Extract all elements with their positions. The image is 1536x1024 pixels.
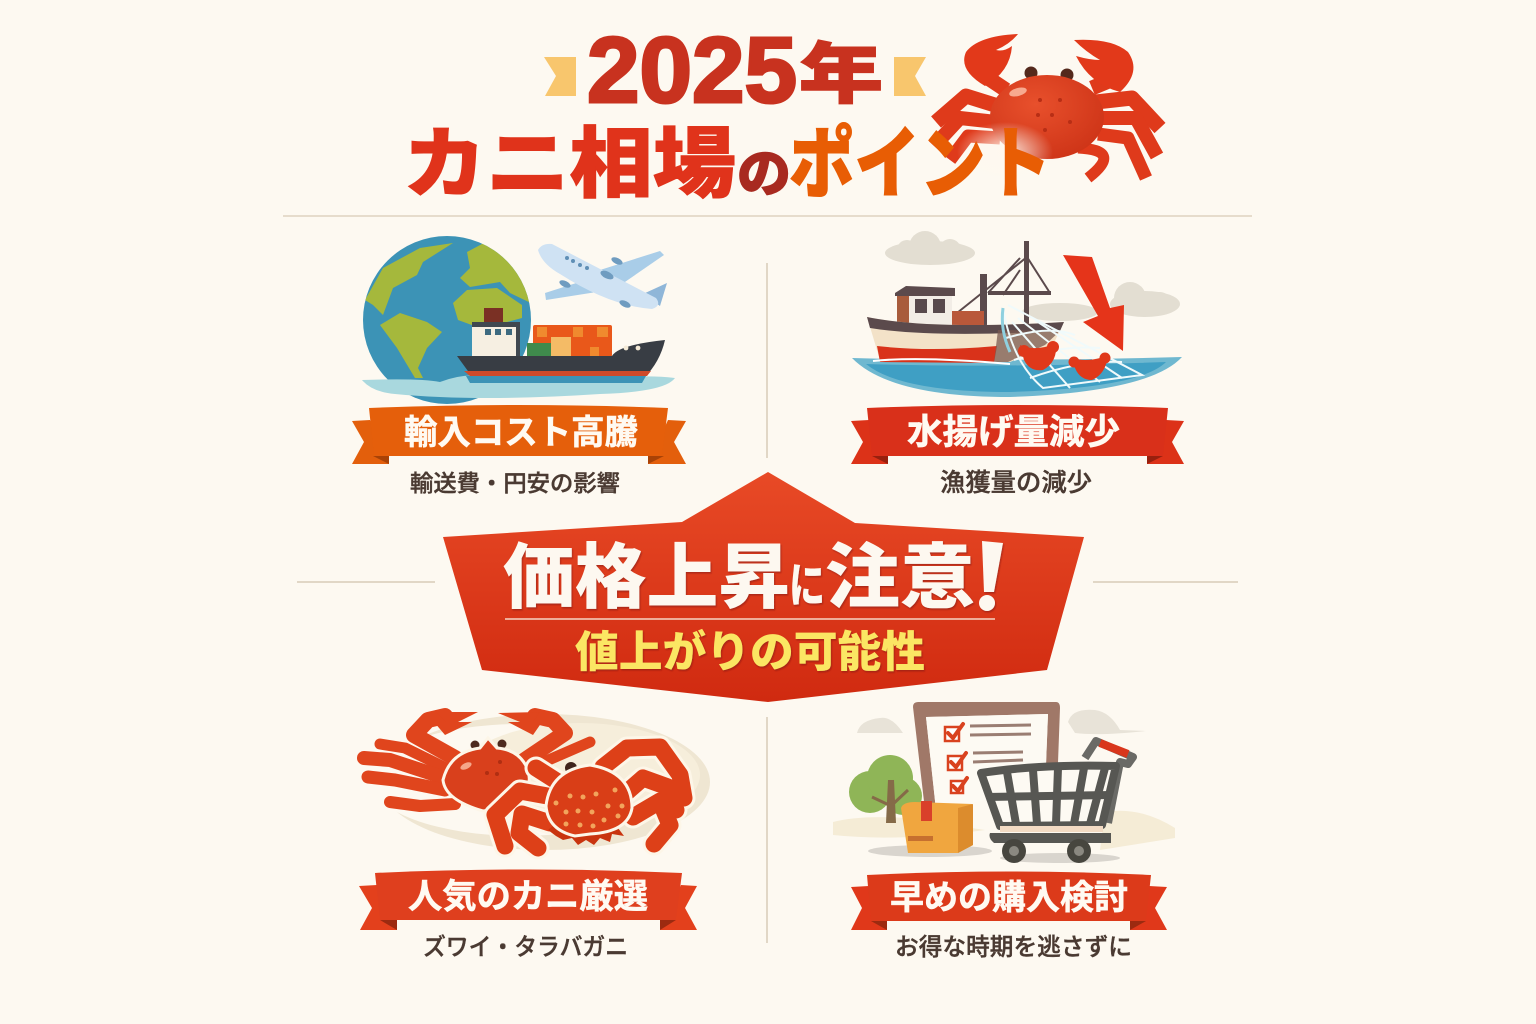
icon: airplane: [538, 244, 667, 309]
icon: tree: [849, 755, 922, 823]
ribbon: buy early: 早めの購入検討: [890, 879, 1128, 917]
title ribbon accent left: [544, 57, 576, 96]
divider rule: [505, 618, 995, 620]
icon: globe: [363, 236, 535, 404]
title: カニ相場のポイント: カニ相場: [403, 122, 736, 208]
caption: import cost: 輸送費・円安の影響: [410, 470, 620, 496]
ribbon: popular crabs: [359, 870, 697, 930]
heading: price warning: [503, 539, 1003, 618]
ribbon: popular crabs: 人気のカニ厳選: [408, 878, 648, 916]
icon: parcel: [868, 801, 992, 857]
heading: price warning: に: [789, 560, 825, 613]
icon: king crab: [495, 747, 684, 848]
icon: snow crab: [364, 712, 590, 811]
title: 2025年: [587, 18, 883, 122]
icon: water: [362, 375, 675, 398]
panel: buy early: [833, 702, 1175, 961]
icon: clouds: [885, 231, 1180, 321]
callout: price warning badge: [443, 472, 1084, 702]
subheading: possible increase: 値上がりの可能性: [575, 628, 925, 677]
panel: lower catch: [851, 231, 1184, 497]
title: カニ相場のポイント: の: [737, 146, 791, 204]
icon: checklist: [913, 702, 1060, 810]
title: カニ相場のポイント: ポイント: [789, 120, 1051, 208]
icon: cargo ship: [457, 308, 665, 383]
title: 2025年: 年: [799, 37, 883, 111]
icon: sea: [852, 357, 1182, 397]
icon: netted crabs: [1018, 341, 1110, 380]
icon: sea inner: [866, 362, 1166, 392]
ribbon: import cost: [352, 405, 686, 464]
caption: popular crabs: ズワイ・タラバガニ: [423, 934, 628, 961]
heading: price warning: 注意: [825, 539, 975, 618]
icon: clouds and sand: [833, 710, 1175, 850]
icon: crab mascot: [934, 34, 1160, 182]
heading: price warning: 価格上昇: [503, 539, 790, 618]
ribbon: import cost: 輸入コスト高騰: [404, 414, 638, 452]
panel: popular crabs: [359, 712, 710, 961]
ribbon: lower catch: [851, 405, 1184, 464]
panel: import cost: [352, 236, 686, 496]
ribbon: lower catch: 水揚げ量減少: [907, 413, 1120, 452]
icon: fishing net: [1002, 305, 1142, 388]
caption: buy early: お得な時期を逃さずに: [895, 934, 1132, 961]
icon: shopping cart: [981, 741, 1133, 863]
title ribbon accent right: [894, 57, 926, 96]
title: 2025年: 2025: [587, 18, 797, 122]
icon: red down arrow: [1063, 255, 1124, 351]
icon: plate: [370, 714, 710, 850]
caption: lower catch: 漁獲量の減少: [940, 469, 1092, 497]
title: カニ相場のポイント: [403, 120, 1051, 208]
ribbon: buy early: [851, 872, 1167, 930]
icon: fishing boat: [867, 241, 1064, 364]
